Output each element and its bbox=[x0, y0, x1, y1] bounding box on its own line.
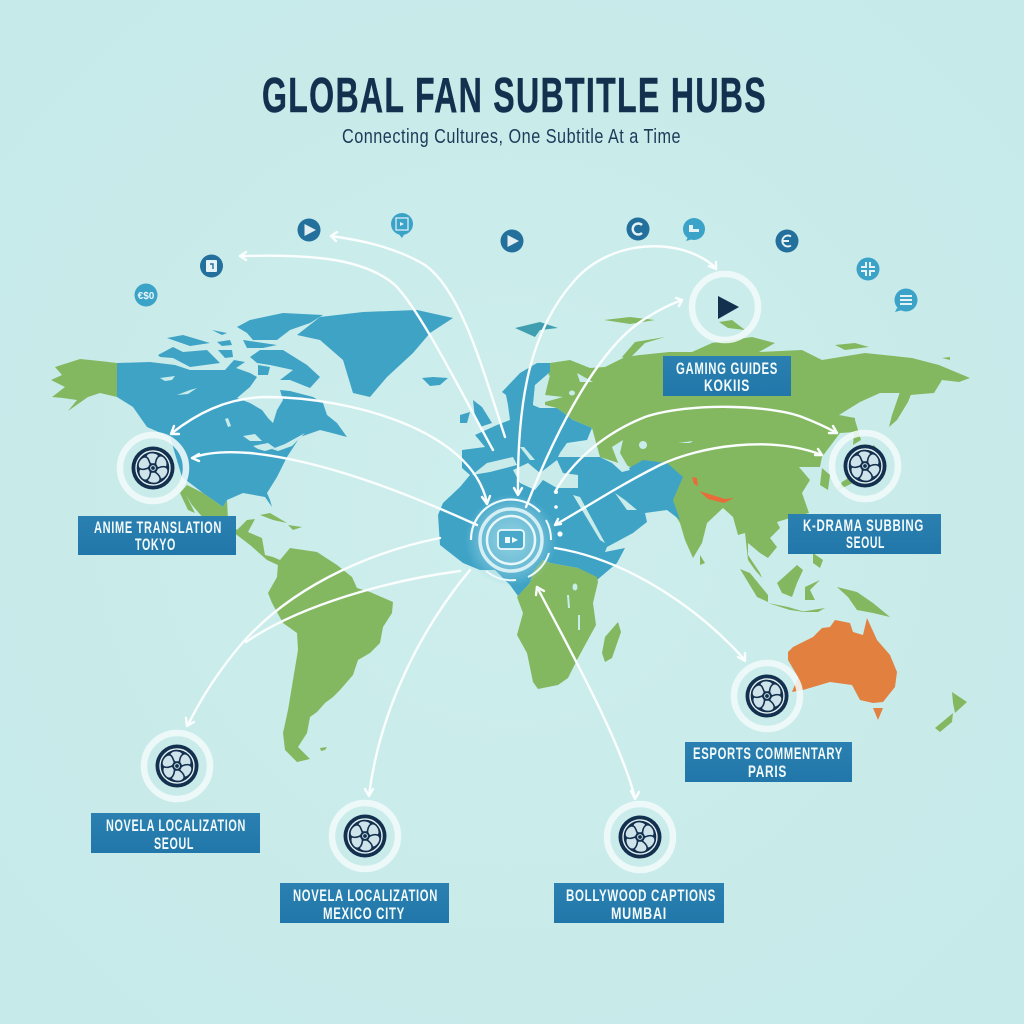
arrow: hub to Esports bbox=[555, 548, 745, 661]
map: Canadian Arctic islands bbox=[158, 313, 323, 388]
hub: Esports Commentary bbox=[685, 663, 852, 782]
node ring bbox=[120, 435, 186, 501]
map: Japan and Korea bbox=[820, 420, 878, 490]
label bbox=[91, 813, 260, 853]
map: Canada and USA bbox=[117, 360, 347, 507]
subtitle: Connecting Cultures, One Subtitle At a Time bbox=[342, 126, 681, 148]
arrow: hub to Novela Mexico City bbox=[365, 570, 470, 796]
icon: chat bubble bbox=[683, 218, 705, 241]
label: GAMING GUIDES bbox=[676, 359, 778, 378]
label: TOKYO bbox=[135, 535, 176, 554]
map: Iceland bbox=[422, 377, 448, 386]
map: Seas and lakes bbox=[472, 373, 693, 630]
label bbox=[788, 514, 941, 554]
title: GLOBAL FAN SUBTITLE HUBS bbox=[262, 69, 767, 123]
map: Australia bbox=[788, 618, 897, 703]
map: Svalbard bbox=[515, 322, 558, 337]
label bbox=[663, 356, 791, 396]
arrow: hub to Novela Seoul bbox=[186, 538, 440, 726]
icon: euro badge bbox=[776, 230, 798, 252]
flow arrows bbox=[171, 232, 837, 799]
icon: play badge centre bbox=[500, 230, 524, 252]
hub: Novela Localization Mexico City bbox=[280, 803, 449, 923]
label: SEOUL bbox=[154, 834, 194, 853]
map: Southeast Asia islands bbox=[700, 553, 890, 617]
map: Caribbean islands bbox=[260, 513, 302, 530]
world map bbox=[51, 310, 970, 762]
icon: film reel bbox=[156, 744, 198, 788]
map: Arctic islands bbox=[604, 317, 950, 360]
map: Kamchatka bbox=[889, 392, 912, 427]
label bbox=[554, 883, 724, 923]
label: NOVELA LOCALIZATION bbox=[106, 816, 246, 835]
map: Eurasia green bbox=[545, 337, 970, 578]
icon: menu bubble bbox=[894, 288, 918, 312]
map: UK and Ireland bbox=[460, 400, 492, 427]
label: ESPORTS COMMENTARY bbox=[693, 744, 843, 763]
node ring bbox=[332, 803, 398, 869]
node ring bbox=[144, 733, 210, 799]
map: Alaska bbox=[51, 359, 117, 411]
icon: currency badge bbox=[134, 284, 158, 306]
icon: film reel bbox=[618, 816, 662, 858]
icon: compress badge bbox=[856, 258, 880, 280]
arrow: hub to Gaming Guides outer bbox=[514, 246, 716, 495]
hub: Novela Localization Seoul bbox=[91, 733, 260, 853]
icon: document badge bbox=[200, 254, 223, 278]
label bbox=[280, 883, 449, 923]
icon: film reel bbox=[844, 444, 886, 488]
icon: play bbox=[718, 296, 739, 319]
label bbox=[78, 516, 236, 555]
hub: Bollywood Captions bbox=[554, 804, 724, 923]
icon: film reel bbox=[344, 814, 386, 858]
hub icon: video subtitle bbox=[498, 530, 524, 549]
hub: Gaming Guides bbox=[663, 274, 791, 396]
label: NOVELA LOCALIZATION bbox=[293, 886, 438, 905]
node ring bbox=[734, 663, 800, 729]
top floating icons bbox=[134, 213, 918, 312]
hub: K-Drama Subbing bbox=[788, 433, 941, 554]
arrow: hub to map edge bbox=[246, 571, 460, 642]
icon: film reel bbox=[746, 674, 788, 718]
label: PARIS bbox=[748, 762, 787, 781]
map: Greenland bbox=[297, 310, 453, 397]
label: MUMBAI bbox=[611, 904, 667, 923]
map: New Zealand bbox=[935, 692, 967, 732]
arrow: hub to K-Drama lower bbox=[555, 444, 822, 525]
arrow: hub to Tokyo lower bbox=[192, 452, 477, 525]
label bbox=[685, 742, 852, 782]
label: KOKIIS bbox=[704, 376, 750, 395]
hub: central glow and rings bbox=[465, 490, 563, 586]
node ring bbox=[832, 433, 898, 499]
map: Madagascar bbox=[602, 622, 621, 662]
label: ANIME TRANSLATION bbox=[94, 518, 222, 537]
map: Tasmania bbox=[873, 708, 883, 720]
icon: currency badge: €$0 bbox=[138, 291, 155, 302]
map: Canadian lakes bbox=[160, 376, 305, 451]
map: South America bbox=[268, 548, 393, 762]
icon: video bubble bbox=[391, 213, 413, 238]
label: SEOUL bbox=[846, 533, 885, 552]
icon: refresh badge bbox=[626, 218, 650, 240]
arrow: hub to Bollywood bbox=[536, 587, 639, 799]
label: MEXICO CITY bbox=[323, 904, 405, 923]
arrow: hub to top left bbox=[240, 252, 493, 450]
map: Mexico and Central America bbox=[180, 485, 280, 566]
map: Falkland Islands bbox=[320, 747, 327, 751]
hub: Anime Translation bbox=[78, 435, 236, 555]
label: K-DRAMA SUBBING bbox=[803, 516, 924, 535]
map: Europe and Scandinavia blue bbox=[438, 363, 683, 596]
map: Southern Africa bbox=[517, 560, 598, 689]
icon: play badge bbox=[298, 218, 320, 242]
arrow: hub to Gaming Guides inner bbox=[526, 298, 682, 507]
arrow: hub to top centre bbox=[331, 232, 505, 437]
node ring bbox=[607, 804, 673, 870]
node ring bbox=[692, 274, 758, 340]
arrow: hub to Tokyo upper bbox=[171, 397, 490, 504]
map: Himalaya highlight bbox=[692, 477, 734, 503]
label: BOLLYWOOD CAPTIONS bbox=[566, 886, 716, 905]
arrow: hub to K-Drama upper bbox=[555, 407, 837, 492]
icon: film reel bbox=[132, 446, 174, 490]
